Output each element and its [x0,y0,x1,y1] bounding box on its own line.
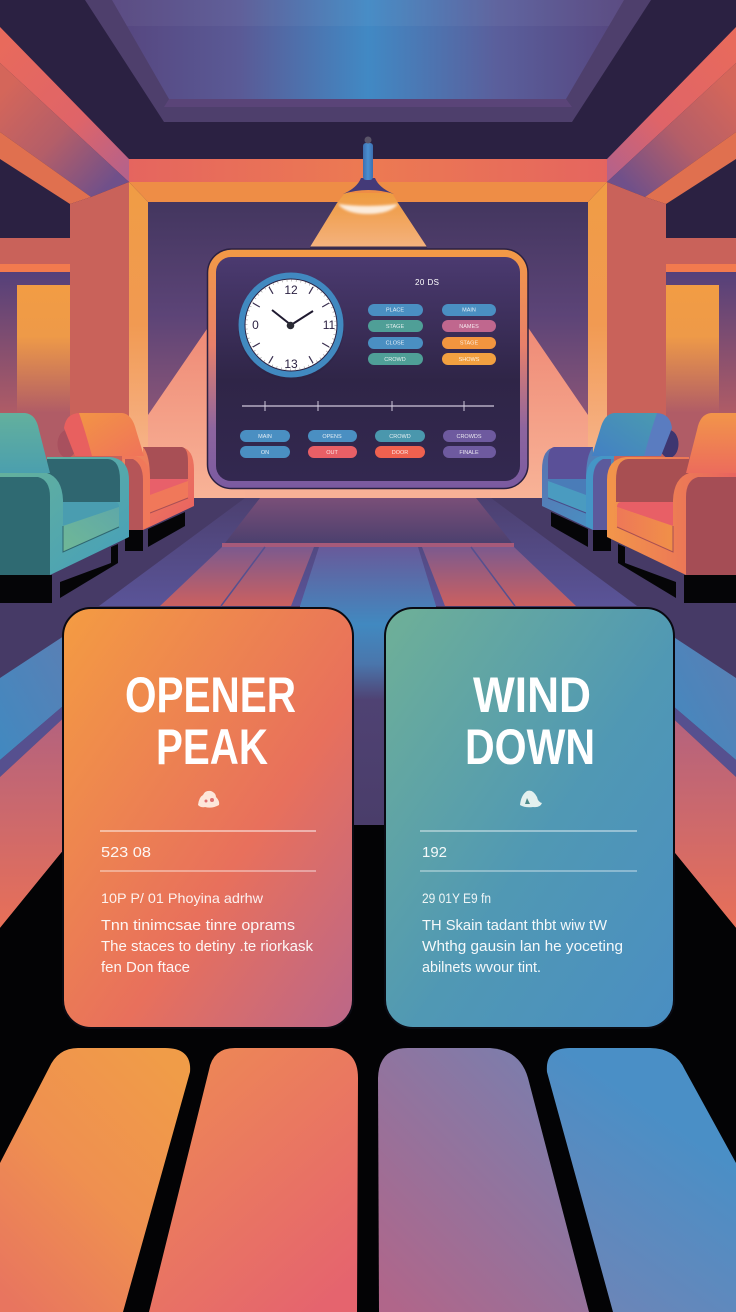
schedule pills: lower grid: DOOR [392,450,408,456]
light cone [310,193,427,247]
schedule pills: lower grid: MAIN [258,434,272,440]
schedule pills: upper grid: STAGE [460,340,478,346]
side wall and window: left [0,238,70,498]
subheading: 29 01Y E9 fn [422,890,491,906]
side floor bands: left [0,632,70,760]
screen heading: 20 DS [415,278,439,287]
body text [422,917,623,976]
timeline [242,401,494,411]
panel: opener peak card [63,608,353,1028]
card title [465,667,595,775]
skylight [85,0,651,122]
schedule pills: lower grid: ON [261,450,269,456]
body text [101,917,313,976]
body text: Whthg gausin lan he yoceting [422,938,623,955]
card title: PEAK [156,719,268,775]
card title: WIND [473,667,591,723]
side wall and window: right [666,238,736,498]
floor planks [160,547,314,606]
body text: abilnets wvour tint. [422,959,541,976]
icon: dome blob [520,791,542,807]
schedule screen [208,249,528,488]
schedule pills: upper grid: CROWD [384,357,406,363]
foreground seat: centre left [149,1048,358,1312]
foreground seat: centre right [378,1048,589,1312]
black lower floor [0,825,736,1312]
schedule pills: lower grid: OPENS [322,434,342,440]
icon: crowd blob [198,791,219,808]
armchair: back right [542,413,678,551]
body text: Tnn tinimcsae tinre oprams [101,917,295,934]
foreground seat: far left [0,1048,190,1312]
pendant lamp [310,136,427,248]
floor strips [99,498,637,606]
schedule pills: lower grid: FINALE [459,450,479,456]
centre aisle [300,547,436,825]
ceiling beam: left [0,27,129,204]
side floor bands: right [666,632,736,760]
armchair: front left [0,413,129,603]
body text: fen Don ftace [101,959,190,976]
schedule pills: lower grid: OUT [326,450,338,456]
foreground seat: far right [547,1048,736,1312]
card title [125,667,296,775]
clock [238,272,344,380]
clock: 0 [252,318,259,332]
floor [0,498,736,928]
back wall [148,202,588,498]
stat value: 192 [422,844,447,861]
panel: wind down card [385,608,674,1028]
card title: OPENER [125,667,296,723]
schedule pills: lower grid: CROWDS [456,434,482,440]
schedule pills: lower grid: CROWD [389,434,411,440]
stat value: 523 08 [101,844,151,861]
clock: 12 [284,283,298,297]
schedule pills: upper grid: MAIN [462,308,476,314]
schedule pills: lower grid [240,430,496,458]
clock: 13 [284,357,298,371]
armchair: back left [58,413,194,551]
columns and lintel [70,159,666,498]
body text: TH Skain tadant thbt wiw tW [422,917,608,934]
schedule pills: upper grid [368,304,496,365]
subheading: 10P P/ 01 Phoyina adrhw [101,890,264,906]
schedule pills: upper grid: SHOWS [459,357,480,363]
schedule pills: upper grid: NAMES [459,324,479,330]
body text: The staces to detiny .te riorkask [101,938,313,955]
ceiling beam: right [607,27,736,204]
card title: DOWN [465,719,595,775]
schedule pills: upper grid: PLACE [386,308,404,314]
clock: 11 [323,318,336,332]
schedule pills: upper grid: STAGE [386,324,404,330]
ceiling [0,0,736,240]
armchair: front right [607,413,736,603]
schedule pills: upper grid: CLOSE [386,340,405,346]
